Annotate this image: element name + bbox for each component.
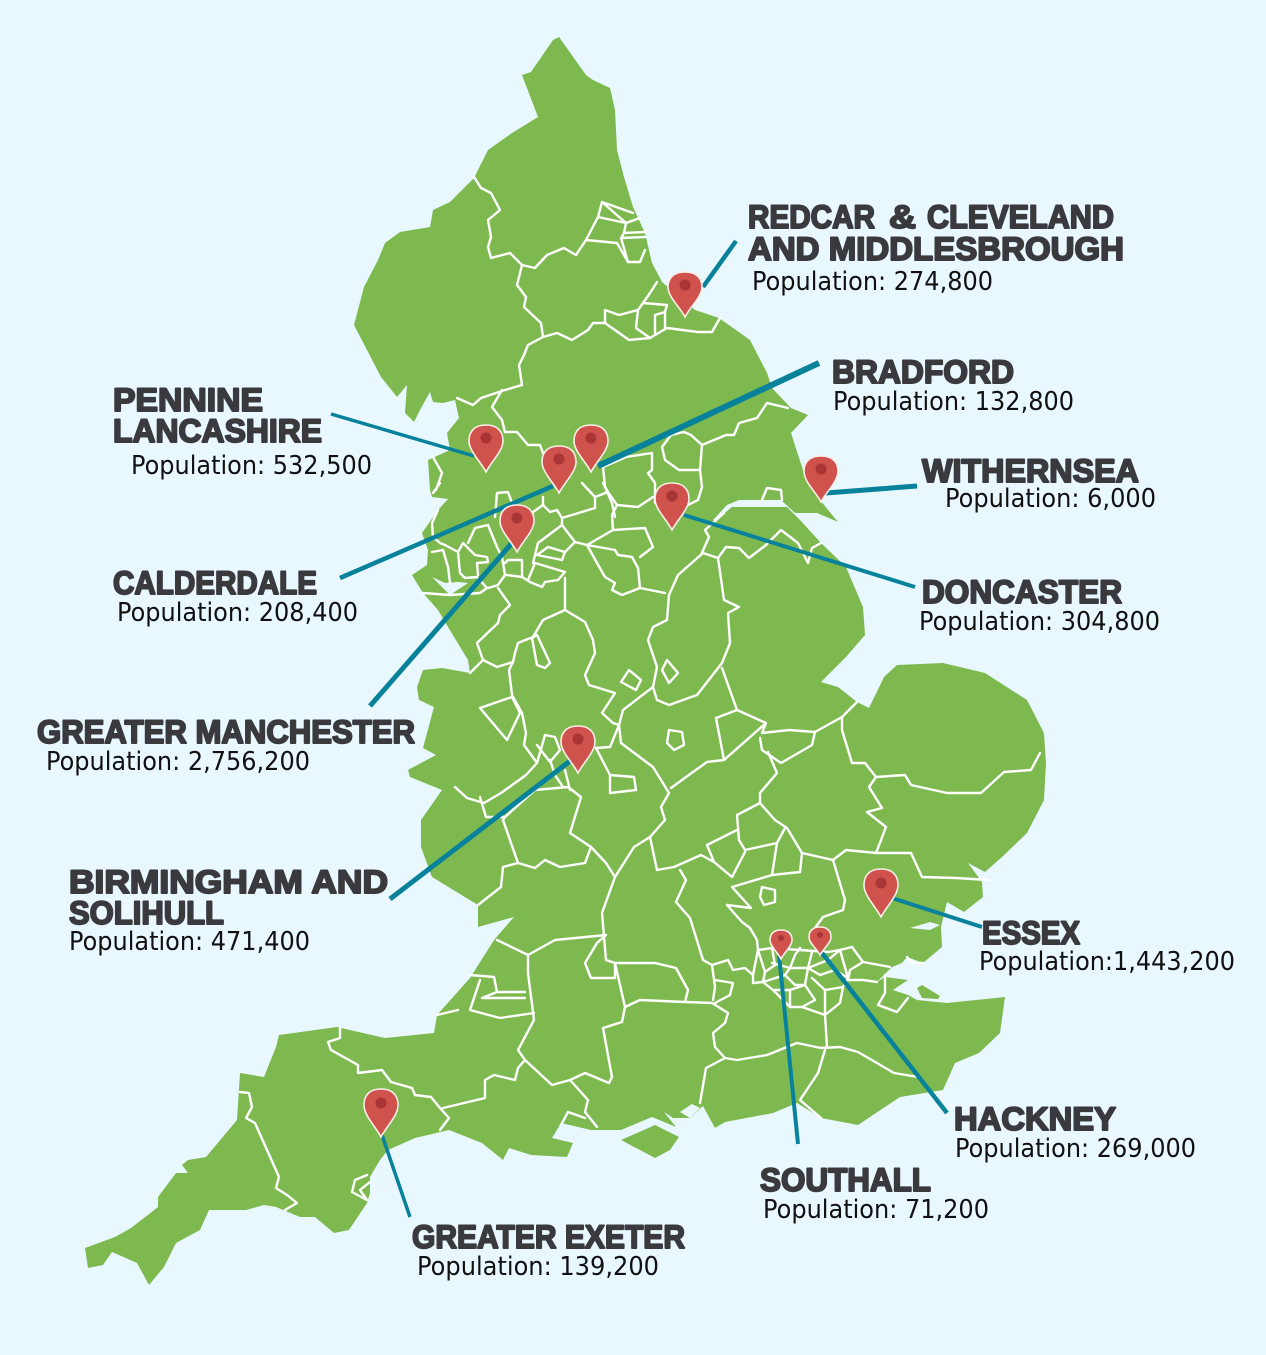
label: Essex (979, 915, 1235, 977)
leader: Hackney (822, 953, 947, 1113)
Essex and Kent boundaries (840, 947, 923, 1012)
label: Hackney: Population: 269,000 (955, 1134, 1196, 1164)
leader: Bradford (598, 363, 819, 466)
pin: Birmingham (561, 726, 595, 773)
pin: Greater Manchester (500, 505, 534, 552)
label: Withernsea (922, 453, 1156, 514)
label: Birmingham and Solihull: BIRMINGHAM AND (69, 864, 388, 900)
label: Doncaster: DONCASTER (922, 574, 1122, 610)
map of England (85, 37, 1046, 1285)
county boundaries (240, 177, 1040, 1210)
label: Withernsea: Population: 6,000 (945, 484, 1156, 514)
label: Essex: ESSEX (982, 915, 1080, 951)
label: Greater Exeter: Population: 139,200 (417, 1252, 659, 1282)
Isle of Wight (621, 1125, 679, 1158)
label: Pennine Lancashire: LANCASHIRE (113, 413, 322, 449)
leader: Redcar (703, 241, 736, 287)
label: Withernsea: WITHERNSEA (922, 453, 1139, 489)
leader: Doncaster (684, 515, 915, 587)
leader: Pennine Lancashire (331, 414, 474, 456)
label: Pennine Lancashire: PENNINE (113, 382, 263, 418)
pin: Redcar (668, 272, 702, 317)
pin: Calderdale (542, 446, 576, 493)
label: Redcar and Middlesbrough: REDCAR (748, 199, 875, 235)
Greater London boroughs (758, 948, 848, 1015)
Lancashire and Merseyside boundaries (423, 492, 512, 595)
pin: Southall (770, 930, 792, 959)
label: Pennine Lancashire (113, 382, 372, 481)
label: Redcar and Middlesbrough (748, 199, 1124, 297)
leader: Southall (779, 955, 798, 1144)
leader: Essex (892, 898, 982, 927)
label: Southall: SOUTHALL (760, 1162, 931, 1198)
pin: Greater Exeter (364, 1089, 398, 1137)
label: Redcar and Middlesbrough: & (889, 199, 916, 235)
leader: Greater Exeter (382, 1135, 410, 1217)
label: Hackney (954, 1101, 1196, 1164)
pin: Pennine Lancashire (469, 425, 503, 472)
pin: Hackney (809, 927, 831, 955)
label: Greater Exeter: GREATER EXETER (412, 1219, 685, 1255)
label: Doncaster: Population: 304,800 (919, 607, 1160, 637)
pin: Doncaster (655, 483, 689, 530)
label: Birmingham and Solihull (69, 864, 388, 957)
label: Doncaster (919, 574, 1160, 637)
label: Birmingham and Solihull: SOLIHULL (69, 895, 224, 931)
label: Calderdale: Population: 208,400 (117, 598, 358, 628)
label: Redcar and Middlesbrough: AND MIDDLESBROUGH (748, 231, 1124, 267)
estuaries (432, 577, 940, 1118)
pin: Bradford (574, 425, 608, 472)
label: Bradford (832, 354, 1074, 417)
label: Greater Manchester: Population: 2,756,200 (46, 747, 310, 777)
label: Redcar and Middlesbrough: Population: 274,800 (752, 267, 993, 297)
label: Greater Exeter (412, 1219, 685, 1282)
label: Redcar and Middlesbrough: CLEVELAND (927, 199, 1114, 235)
label: Calderdale (113, 565, 358, 628)
label: Calderdale: CALDERDALE (113, 565, 317, 601)
label: Hackney: HACKNEY (954, 1101, 1116, 1137)
leader: Calderdale (340, 486, 553, 578)
label: Greater Manchester: GREATER MANCHESTER (37, 714, 415, 750)
label: Pennine Lancashire: Population: 532,500 (131, 451, 372, 481)
label: Bradford: BRADFORD (832, 354, 1014, 390)
label: Bradford: Population: 132,800 (833, 387, 1074, 417)
leader: Greater Manchester (370, 543, 512, 706)
pin: Withernsea (804, 456, 838, 502)
label: Greater Manchester (37, 714, 415, 777)
label: Birmingham and Solihull: Population: 471,400 (69, 927, 310, 957)
pin: Essex (864, 869, 898, 917)
landmass (85, 37, 1046, 1285)
label: Southall (760, 1162, 989, 1225)
Isle of Sheppey (917, 985, 940, 999)
leader: Birmingham (390, 761, 570, 899)
leader: Withernsea (826, 486, 917, 493)
label: Southall: Population: 71,200 (763, 1195, 989, 1225)
label: Essex: Population:1,443,200 (979, 947, 1235, 977)
